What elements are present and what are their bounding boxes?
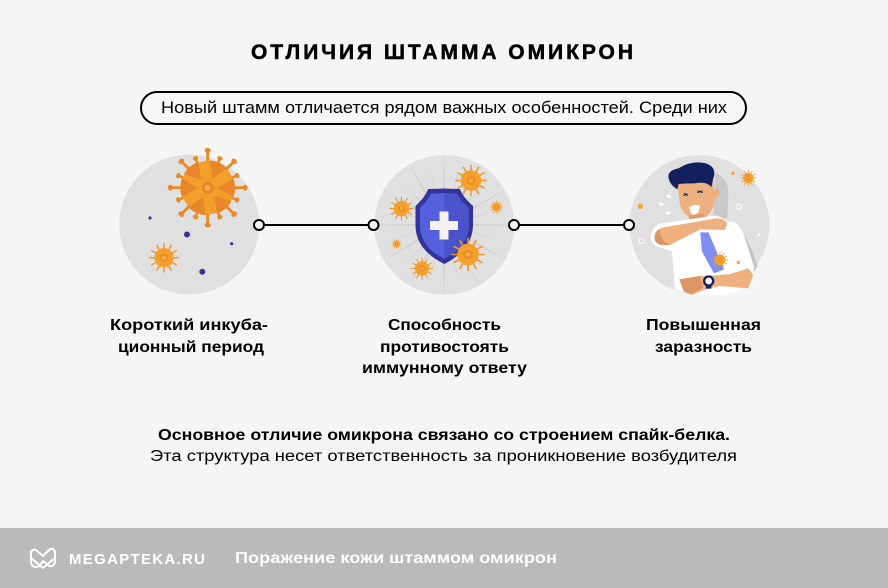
- label: immune resistance: [362, 317, 527, 377]
- footer caption: Поражение кожи штаммом омикрон: [235, 550, 557, 567]
- icon: small virus: [150, 243, 178, 272]
- connector: first to second: [254, 220, 378, 230]
- icon: large virus: [168, 148, 248, 228]
- text block: main difference: [150, 427, 737, 465]
- label: immune resistance: иммунному ответу: [362, 360, 527, 377]
- icon: logo: [31, 549, 55, 568]
- label: contagiousness: [646, 317, 761, 356]
- footer bar: [0, 528, 888, 588]
- sunburst rays: [376, 157, 512, 293]
- icon: blue particles: [148, 216, 233, 275]
- text block: main difference: Основное отличие омикрона связано со строением спайк-белка.: [158, 427, 730, 444]
- brand name: MEGAPTEKA.RU: [69, 551, 205, 568]
- label: immune resistance: Способность: [388, 317, 501, 334]
- illustration: coughing man: [638, 162, 760, 295]
- label: short incubation: [110, 317, 268, 356]
- connector: second to third: [509, 220, 634, 230]
- panel: contagiousness illustration: [630, 155, 770, 295]
- label: contagiousness: заразность: [655, 339, 752, 356]
- icons: viruses around shield: [390, 165, 503, 279]
- label: contagiousness: Повышенная: [646, 317, 761, 334]
- subtitle pill: [141, 92, 746, 124]
- title: ОТЛИЧИЯ ШТАММА ОМИКРОН: [251, 41, 633, 64]
- label: short incubation: ционный период: [118, 339, 264, 356]
- panel: immune resistance illustration: [374, 155, 514, 295]
- icons: viruses near man: [712, 170, 756, 268]
- label: short incubation: Короткий инкуба-: [110, 317, 268, 334]
- subtitle pill: Новый штамм отличается рядом важных особенностей. Среди них: [161, 99, 728, 117]
- icon: shield: [416, 188, 473, 264]
- panel: short incubation illustration: [119, 148, 259, 294]
- label: immune resistance: противостоять: [380, 339, 509, 356]
- text block: main difference: Эта структура несет ответственность за проникновение возбудителя: [150, 448, 737, 465]
